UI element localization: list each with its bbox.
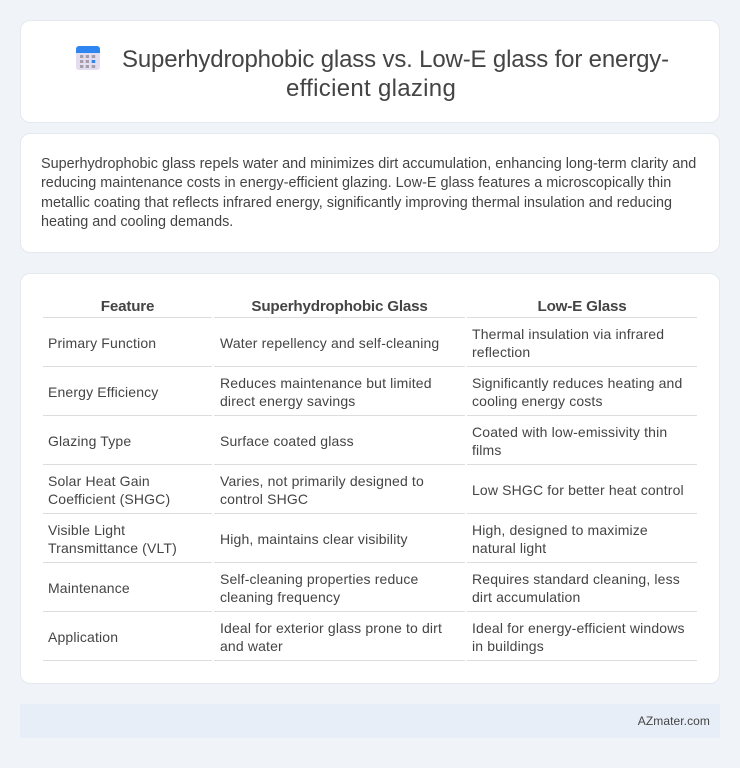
table header: Feature: [101, 298, 154, 315]
row: Application: and water: [220, 638, 283, 654]
row: Primary Function: Primary Function: [48, 335, 156, 351]
row: Maintenance: [48, 571, 680, 605]
row: Maintenance: dirt accumulation: [472, 589, 580, 605]
row: Primary Function: Thermal insulation via infrared: [472, 326, 664, 342]
row: Maintenance: cleaning frequency: [220, 589, 340, 605]
row: Solar Heat Gain Coefficient: control SHGC: [220, 491, 308, 507]
row: Application: in buildings: [472, 638, 544, 654]
row: Solar Heat Gain Coefficient: Low SHGC for better heat control: [472, 482, 684, 498]
row: Energy Efficiency: direct energy savings: [220, 393, 355, 409]
table header: [101, 298, 626, 315]
row: Primary Function: Water repellency and self-cleaning: [220, 335, 439, 351]
row: Application: Application: [48, 629, 118, 645]
introduction text: Superhydrophobic glass repels water and minimizes dirt accumulation, enhancing long-term clarity and: [41, 156, 696, 172]
row: Glazing Type: films: [472, 442, 502, 458]
row: Maintenance: Requires standard cleaning, less: [472, 571, 680, 587]
comparison table: [43, 298, 697, 661]
row: Visible Light Transmittance: Visible Light: [48, 522, 125, 538]
row: Visible Light Transmittance: natural light: [472, 540, 546, 556]
title: efficient glazing: [286, 75, 456, 102]
row: Glazing Type: [48, 424, 667, 458]
table header: Low-E Glass: [538, 298, 626, 315]
row: Energy Efficiency: Energy Efficiency: [48, 384, 158, 400]
row: Visible Light Transmittance: High, maintains clear visibility: [220, 531, 408, 547]
row: Solar Heat Gain Coefficient: Coefficient (SHGC): [48, 491, 170, 507]
panel: title card: [20, 20, 720, 123]
row: Primary Function: [48, 326, 664, 360]
footer bar: [20, 704, 720, 738]
row: Energy Efficiency: cooling energy costs: [472, 393, 603, 409]
row: Maintenance: Self-cleaning properties reduce: [220, 571, 418, 587]
title: Superhydrophobic glass vs. Low-E glass for energy-: [122, 46, 669, 73]
introduction text: [41, 156, 696, 230]
row: Primary Function: reflection: [472, 344, 530, 360]
footer text: AZmater.com: [638, 714, 710, 728]
icon: calendar: [76, 46, 100, 70]
row: Glazing Type: Surface coated glass: [220, 433, 354, 449]
title: [122, 46, 669, 102]
row: Energy Efficiency: [48, 375, 682, 409]
introduction text: reducing maintenance costs in energy-efficient glazing. Low-E glass features a microscopically thin: [41, 175, 671, 191]
row: Application: Ideal for energy-efficient windows: [472, 620, 685, 636]
row: Solar Heat Gain Coefficient: Solar Heat Gain: [48, 473, 150, 489]
row: Solar Heat Gain Coefficient: Varies, not primarily designed to: [220, 473, 424, 489]
row: Energy Efficiency: Significantly reduces heating and: [472, 375, 682, 391]
row: Visible Light Transmittance: Transmittance (VLT): [48, 540, 177, 556]
panel: comparison table card: [20, 273, 720, 684]
row: Application: [48, 620, 685, 654]
row: Maintenance: Maintenance: [48, 580, 130, 596]
row: Visible Light Transmittance: High, designed to maximize: [472, 522, 648, 538]
row: Energy Efficiency: Reduces maintenance but limited: [220, 375, 432, 391]
table header: Superhydrophobic Glass: [251, 298, 428, 315]
introduction text: heating and cooling demands.: [41, 214, 233, 230]
panel: introduction card: [20, 133, 720, 253]
row: Glazing Type: Coated with low-emissivity thin: [472, 424, 667, 440]
row: Solar Heat Gain Coefficient: [48, 473, 684, 507]
row: Glazing Type: Glazing Type: [48, 433, 131, 449]
row: Visible Light Transmittance: [48, 522, 648, 556]
row: Application: Ideal for exterior glass prone to dirt: [220, 620, 442, 636]
introduction text: metallic coating that reflects infrared energy, significantly improving thermal insulation and reducing: [41, 194, 672, 210]
